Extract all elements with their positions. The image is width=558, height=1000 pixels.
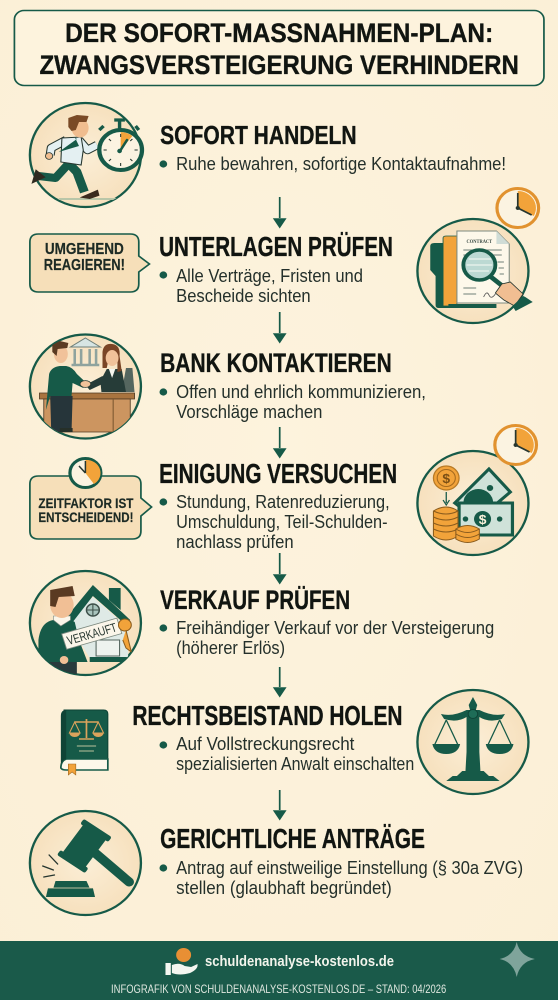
bullet text: (höherer Erlös) [176,639,285,659]
icon: money and coins: $ [442,471,451,486]
callout: umgehend reagieren: REAGIEREN! [44,255,125,274]
bullet text: spezialisierten Anwalt einschalten [176,755,414,775]
icon: money and coins [417,451,528,555]
bullet text: Bescheide sichten [176,287,311,307]
icon: running man with stopwatch [30,103,142,207]
heading: UNTERLAGEN PRÜFEN [159,232,393,263]
heading: GERICHTLICHE ANTRÄGE [160,824,425,855]
callout: zeitfaktor: ZEITFAKTOR IST [38,496,134,512]
arrow [274,197,285,227]
arrow [274,553,285,583]
heading: SOFORT HANDELN [160,121,357,150]
bullet text [159,493,390,553]
bullet text: Offen und ehrlich kommunizieren, [176,383,426,403]
bullet text [159,619,494,659]
step 7: gerichtliche antraege [30,811,523,915]
step 4: einigung versuchen [159,426,536,555]
bullet text: Alle Verträge, Fristen und [176,267,363,287]
bullet text: nachlass prüfen [176,533,294,553]
arrow [274,427,285,457]
bullet text [159,383,426,423]
logo text: schuldenanalyse-kostenlos.de [205,953,394,970]
icon: bank handshake [30,334,141,438]
title: DER SOFORT-MASSNAHMEN-PLAN: [65,18,493,48]
icon: house sale: VERKAUFT [65,620,119,648]
icon: logo hand with coin [165,948,198,975]
icon: money and coins: $ [479,512,487,527]
heading: VERKAUF PRÜFEN [160,585,350,615]
heading: BANK KONTAKTIEREN [160,348,392,378]
bullet text: Freihändiger Verkauf vor der Versteigerung [176,619,494,639]
title [14,10,544,86]
bullet text: Ruhe bewahren, sofortige Kontaktaufnahme! [176,155,506,175]
step 2: unterlagen pruefen [159,188,539,323]
bullet text: stellen (glaubhaft begründet) [176,879,392,899]
bullet text: Auf Vollstreckungsrecht [176,735,355,755]
step 1: sofort handeln [30,103,506,207]
step 6: rechtsbeistand holen [61,690,528,794]
bullet text [159,267,363,307]
step 5: verkauf pruefen [30,571,494,685]
callout: umgehend reagieren: UMGEHEND [45,239,124,258]
source line: INFOGRAFIK VON SCHULDENANALYSE-KOSTENLOS.DE – STAND: 04/2026 [111,982,447,996]
bullet text [159,859,523,899]
icon: orange clock [497,188,539,228]
icon: contract and magnifier: CONTRACT [467,239,493,245]
icon: gavel [30,811,141,915]
step 3: bank kontaktieren [30,334,426,438]
icon: orange clock [495,426,536,464]
callout: zeitfaktor [30,458,152,539]
heading: RECHTSBEISTAND HOLEN [132,701,402,732]
callout: zeitfaktor: ENTSCHEIDEND! [38,510,133,526]
arrow [274,312,285,342]
callout: umgehend reagieren [30,234,149,292]
arrow [274,667,285,696]
bullet text: Umschuldung, Teil-Schulden- [176,513,388,533]
bullet text [159,735,414,775]
icon: contract and magnifier [417,219,533,323]
arrow [274,790,285,819]
bullet text: Vorschläge machen [176,403,322,423]
heading: EINIGUNG VERSUCHEN [159,459,397,490]
icon: house sale [30,571,141,685]
icon: scales of justice [417,690,528,794]
icon: sparkle star [500,942,535,977]
icon: law book [61,710,108,775]
footer [0,941,558,1000]
bullet text: Stundung, Ratenreduzierung, [176,493,390,513]
